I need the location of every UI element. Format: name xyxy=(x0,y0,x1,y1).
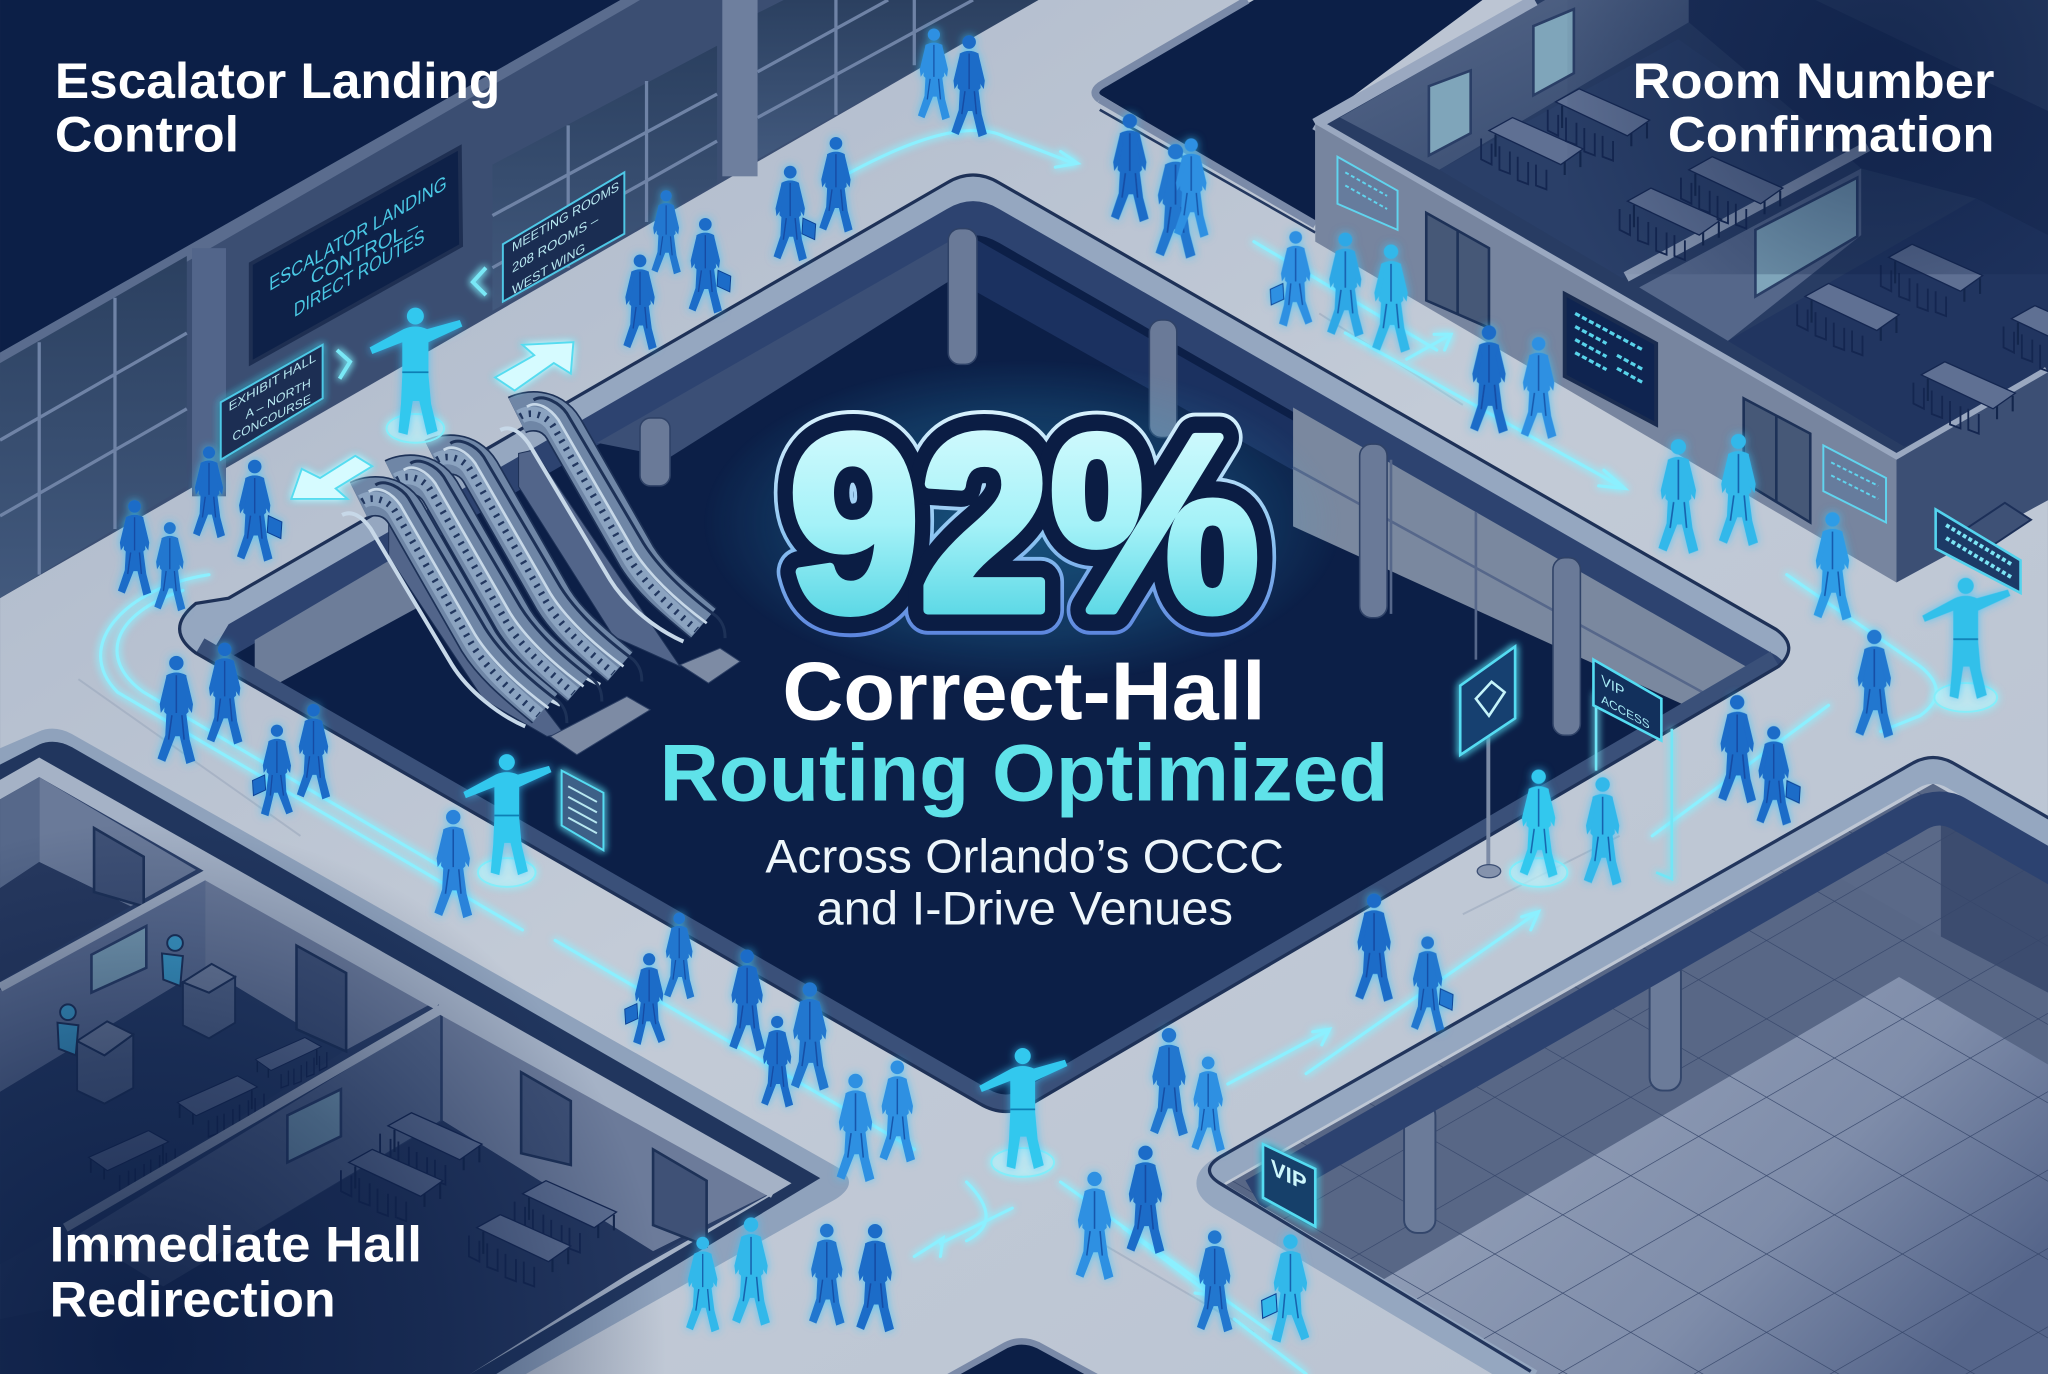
people: upper concourse xyxy=(623,28,987,350)
wall sign: exhibit hall: CONCOURSE xyxy=(233,391,311,444)
meeting tables xyxy=(1481,89,2048,434)
wall sign: escalator landing control xyxy=(251,148,461,363)
people: left concourse xyxy=(157,643,551,918)
stat: 92%: 92% xyxy=(789,384,1259,664)
room tables xyxy=(89,1038,617,1286)
label: Escalator Landing Control xyxy=(55,53,500,163)
bench and hallway sign xyxy=(1936,503,2031,593)
people: escalator landing xyxy=(118,308,462,611)
heading: Correct-Hall: Correct-Hall xyxy=(782,647,1266,738)
label: Room Number Confirmation: Confirmation xyxy=(1668,107,1994,163)
panel: lower-centre opening xyxy=(935,1341,1110,1374)
doors xyxy=(1426,213,1810,522)
stat: 92% xyxy=(703,359,1343,686)
wall sign: exhibit hall: EXHIBIT HALL xyxy=(229,349,317,414)
VIP rim sign xyxy=(1263,1144,1315,1226)
podiums with seated staff xyxy=(57,935,235,1104)
wall sign: meeting rooms: 208 ROOMS – xyxy=(512,211,598,276)
room doors xyxy=(94,828,707,1246)
people: lower-right concourse xyxy=(1355,578,2010,1032)
label: Immediate Hall Redirection: Redirection xyxy=(50,1272,336,1328)
label: Immediate Hall Redirection xyxy=(50,1217,422,1328)
wall sign: exhibit hall xyxy=(221,345,323,460)
atrium columns xyxy=(1404,960,1681,1233)
VIP overhead sign: VIP xyxy=(1601,672,1624,701)
panel: upper-left wall with windows xyxy=(0,0,1038,598)
panel: upper-right rooms xyxy=(1315,0,2048,593)
panel: lower-right atrium xyxy=(1176,758,2048,1374)
sign chevrons xyxy=(337,268,486,379)
label: Escalator Landing Control: Escalator Landing xyxy=(55,53,500,109)
escalator side panels xyxy=(389,450,680,736)
stat: 92%: 92% xyxy=(789,384,1259,664)
stat: 92%: 92% xyxy=(789,384,1259,664)
wall sign: meeting rooms: WEST WING xyxy=(512,240,585,299)
label: Room Number Confirmation: Room Number xyxy=(1633,53,1994,109)
coordinator floor rings xyxy=(387,414,1997,1177)
panel: lower-left rooms xyxy=(0,729,849,1374)
divider wall caps xyxy=(0,875,773,1228)
wall sign: escalator landing control: DIRECT ROUTES xyxy=(294,225,425,322)
people: lower-left concourse xyxy=(625,913,915,1182)
projection screens xyxy=(1429,9,1857,296)
people: right concourse xyxy=(1111,114,1851,620)
wall sign: escalator landing control: ESCALATOR LANDING xyxy=(269,172,447,296)
label: Escalator Landing Control: Control xyxy=(55,107,239,163)
wayfinding pole sign xyxy=(1460,647,1515,878)
room screens xyxy=(91,926,341,1162)
wall display screen xyxy=(1565,294,1656,424)
heading: Routing Optimized: Routing Optimized xyxy=(660,729,1388,819)
VIP rim sign: VIP xyxy=(1271,1154,1307,1196)
label: Immediate Hall Redirection: Immediate Hall xyxy=(50,1217,422,1273)
wall sign: exhibit hall: A – NORTH xyxy=(246,375,311,422)
wall sign: meeting rooms: MEETING ROOMS xyxy=(512,178,619,255)
escalator landing plates xyxy=(550,648,740,755)
VIP overhead sign: ACCESS xyxy=(1601,692,1650,732)
wall signs xyxy=(1337,157,1886,522)
subheading: venue line two: and I-Drive Venues xyxy=(816,882,1233,935)
VIP overhead sign xyxy=(1593,660,1672,879)
wall sign: escalator landing control: CONTROL – xyxy=(311,214,418,289)
escalator runs xyxy=(342,398,725,726)
panel: upper pit xyxy=(1095,0,1482,232)
panel: central atrium void xyxy=(157,157,1802,1164)
people: bottom junction xyxy=(686,1028,1309,1343)
subheading: venue line one: Across Orlando’s OCCC xyxy=(765,829,1284,882)
escalators xyxy=(342,398,740,755)
floor direction arrows xyxy=(291,342,573,499)
void columns xyxy=(640,229,1580,735)
label: Room Number Confirmation xyxy=(1633,53,1994,163)
schedule placard xyxy=(562,771,603,850)
wall sign: meeting rooms xyxy=(503,172,624,302)
